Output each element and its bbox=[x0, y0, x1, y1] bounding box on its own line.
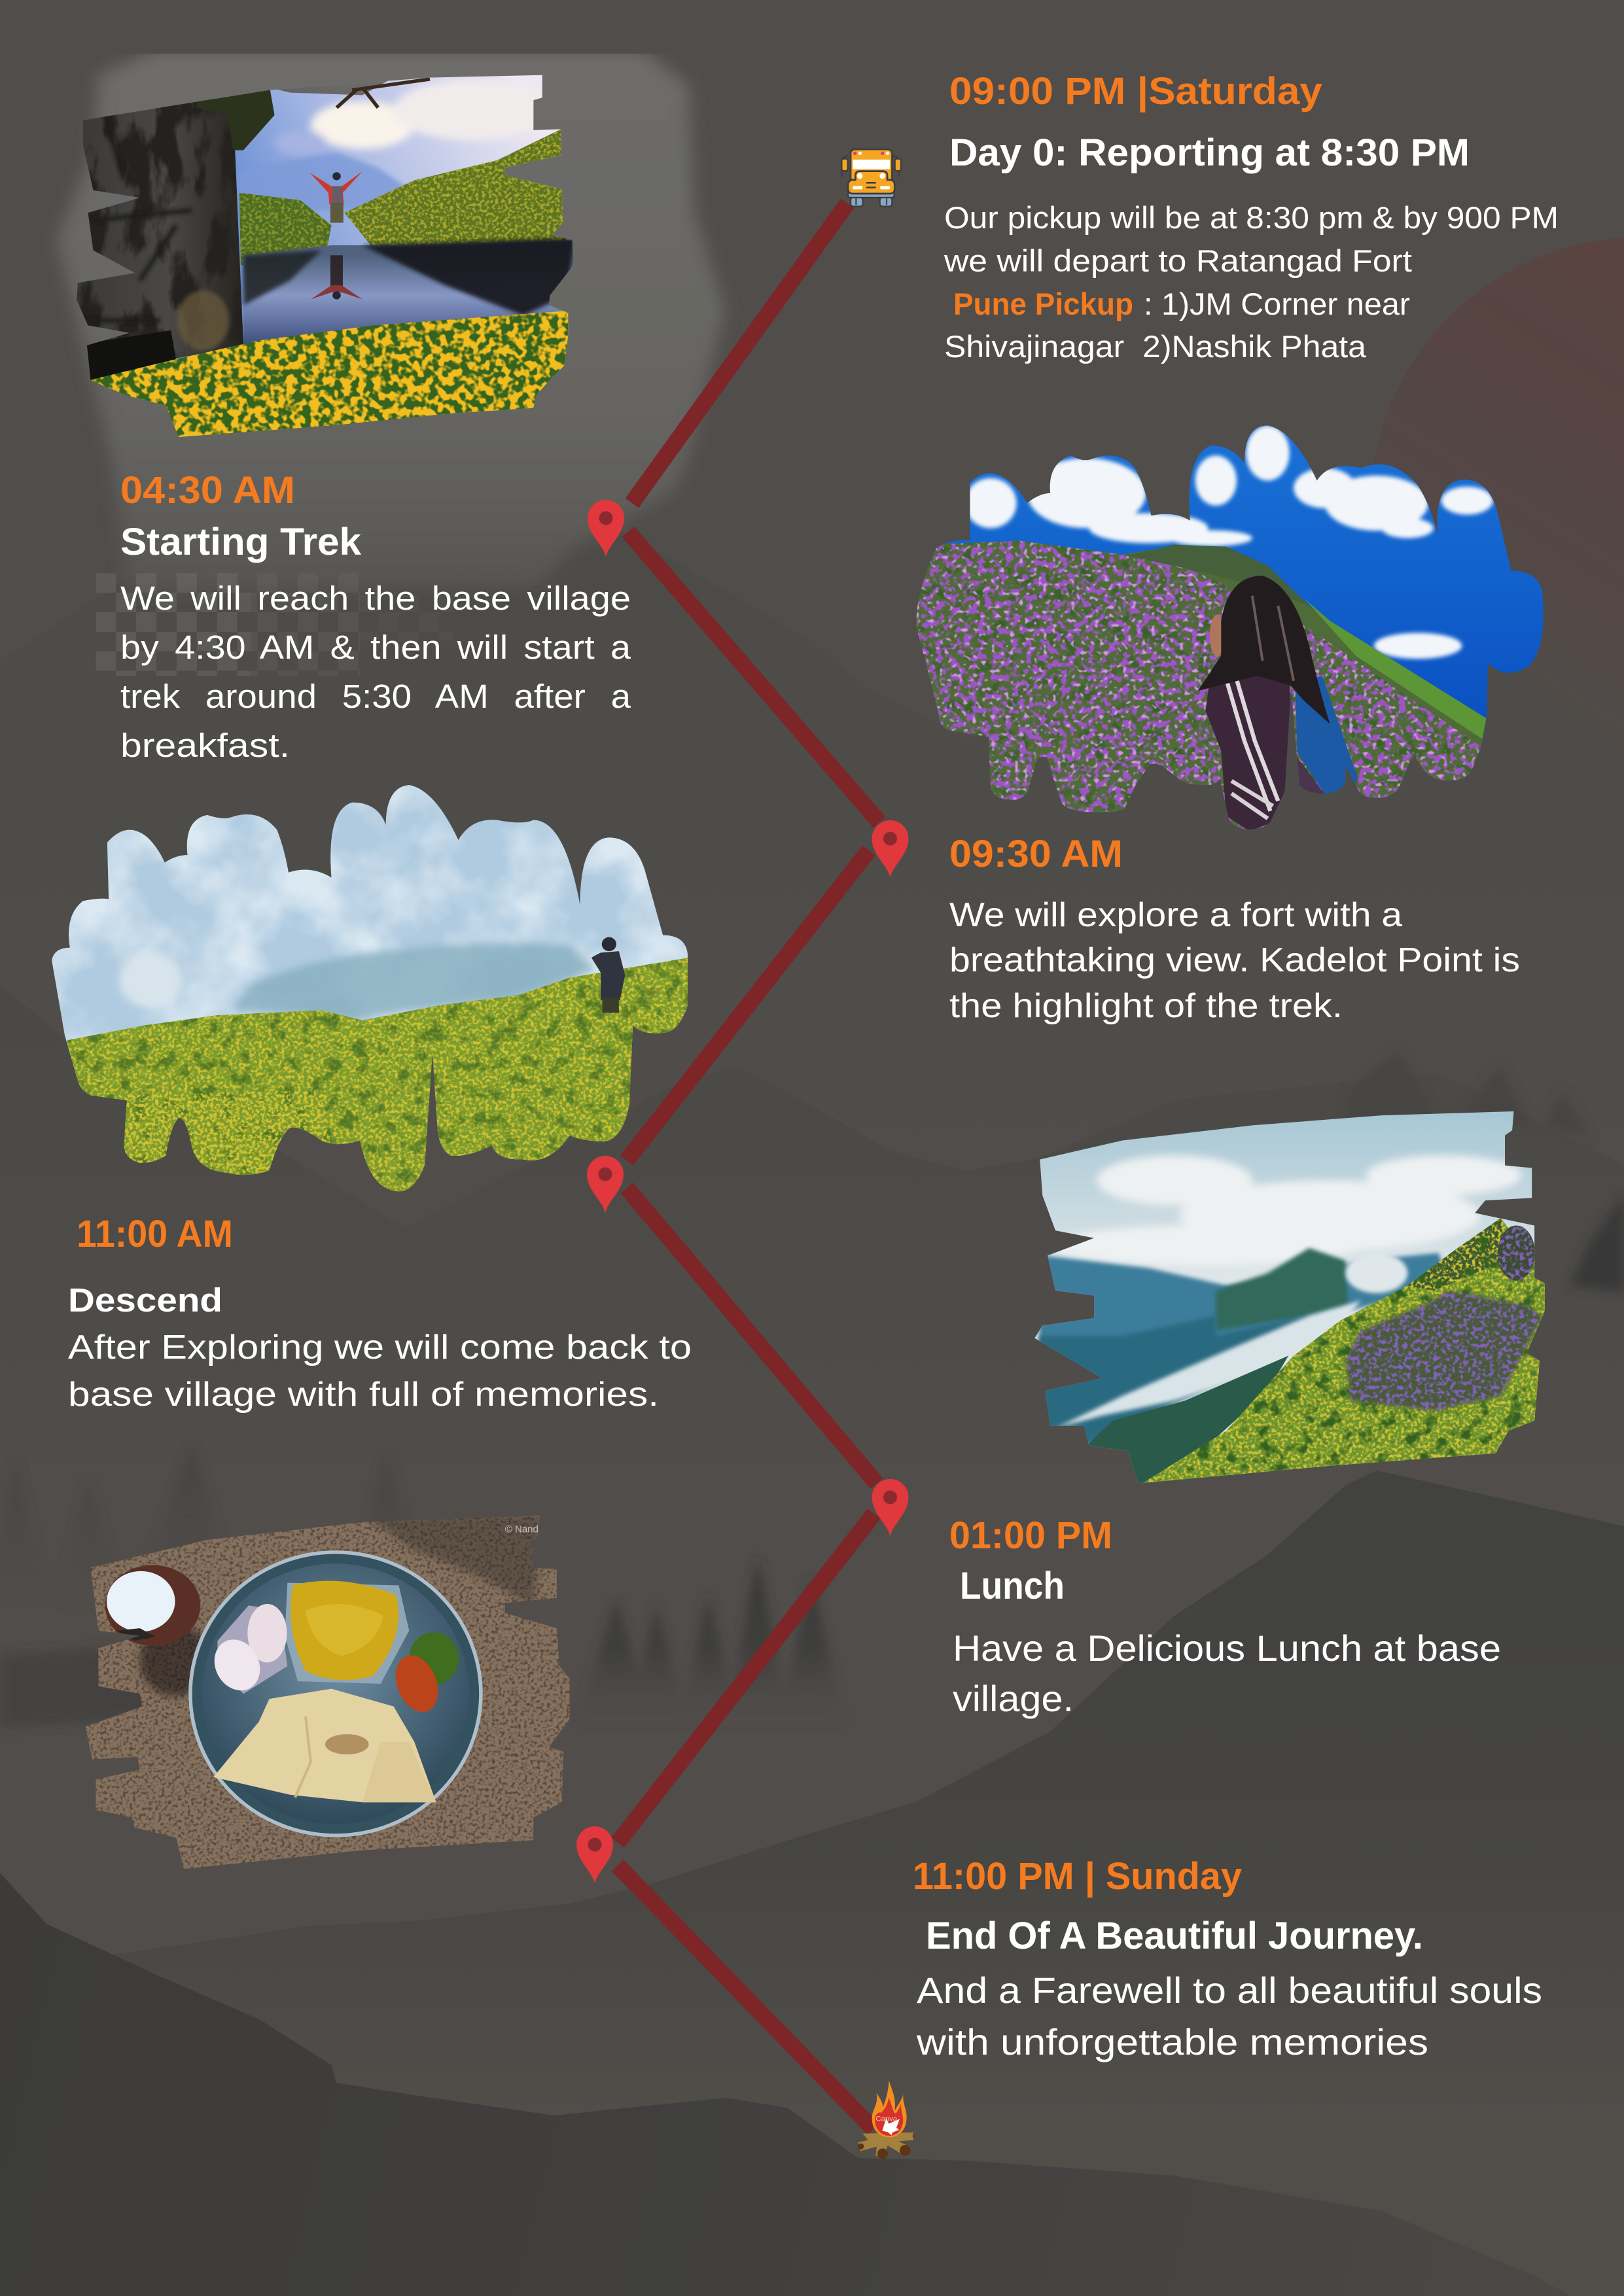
reflected hiker bbox=[311, 255, 362, 300]
background: red sun circle bbox=[1371, 237, 1624, 776]
description bbox=[68, 1329, 692, 1414]
description: village. bbox=[953, 1678, 1074, 1719]
folded roti bbox=[213, 1689, 436, 1802]
description: trek around 5:30 AM after a bbox=[120, 678, 631, 715]
background: front dark ridge bbox=[0, 1873, 1570, 2296]
description: : 1)JM Corner near bbox=[1144, 287, 1410, 321]
text: 09:00 PM Saturday stop bbox=[944, 70, 1559, 364]
background: misty pine trees bbox=[0, 1051, 1624, 1727]
icon: campfire bbox=[858, 2080, 915, 2159]
photo: thali plate on stone bbox=[67, 1510, 575, 1873]
photo: valley with clouds and wildflower slope bbox=[1029, 1105, 1553, 1496]
description: breathtaking view. Kadelot Point is bbox=[949, 941, 1520, 979]
heading: Day 0: Reporting at 8:30 PM bbox=[949, 131, 1470, 174]
map pin: 11:00 PM bbox=[576, 1826, 613, 1884]
time label: 01:00 PM bbox=[949, 1514, 1112, 1557]
text: 11:00 AM stop bbox=[68, 1213, 692, 1414]
background: faded checker texture bbox=[96, 573, 453, 676]
heading: Lunch bbox=[960, 1565, 1065, 1607]
map pin: 01:00 PM bbox=[872, 1479, 908, 1537]
description bbox=[916, 1970, 1542, 2062]
description: After Exploring we will come back to bbox=[68, 1329, 692, 1366]
time label: 09:00 PM |Saturday bbox=[949, 70, 1322, 113]
time label: 04:30 AM bbox=[120, 469, 295, 512]
description: with unforgettable memories bbox=[916, 2021, 1428, 2062]
photo: thali plate on stone: © Nand bbox=[505, 1525, 538, 1535]
heading: End Of A Beautiful Journey. bbox=[926, 1915, 1423, 1957]
description: by 4:30 AM & then will start a bbox=[120, 629, 631, 666]
purple flower clusters bbox=[1345, 1225, 1542, 1411]
icon: campfire: Canva bbox=[875, 2115, 898, 2123]
heading: Starting Trek bbox=[120, 521, 362, 563]
description: We will explore a fort with a bbox=[949, 896, 1402, 934]
time label: 11:00 AM bbox=[77, 1213, 233, 1255]
photo: misty green meadow with photographer bbox=[46, 780, 694, 1196]
steel plate bbox=[188, 1550, 483, 1837]
description: breakfast. bbox=[120, 727, 290, 764]
description bbox=[953, 1627, 1501, 1719]
description: And a Farewell to all beautiful souls bbox=[917, 1970, 1542, 2011]
description: Our pickup will be at 8:30 pm & by 900 PM bbox=[944, 200, 1559, 235]
description: Pune Pickup bbox=[953, 287, 1133, 321]
description bbox=[944, 200, 1559, 364]
clay cup of buttermilk bbox=[105, 1565, 200, 1646]
description: the highlight of the trek. bbox=[949, 987, 1343, 1025]
map pin: 09:30 AM bbox=[872, 820, 908, 878]
time label: 11:00 PM | Sunday bbox=[913, 1855, 1242, 1898]
route: connector lines bbox=[618, 203, 879, 2129]
background: smoke cloud behind first photo bbox=[57, 50, 725, 591]
description bbox=[949, 896, 1520, 1025]
description: We will reach the base village bbox=[120, 580, 631, 617]
description: we will depart to Ratangad Fort bbox=[944, 243, 1412, 278]
description: base village with full of memories. bbox=[68, 1376, 659, 1414]
background: middle mountain range bbox=[0, 985, 1624, 1635]
icon: school bus bbox=[841, 149, 901, 207]
description: Have a Delicious Lunch at base bbox=[953, 1627, 1501, 1669]
photo: hiker reflected in lake with yellow flowers bbox=[67, 70, 580, 445]
background: far mountain range bbox=[0, 487, 1624, 1439]
background: near mountain range bbox=[0, 1470, 1624, 2296]
map pin: 11:00 AM bbox=[587, 1156, 624, 1213]
map pin: 04:30 AM bbox=[588, 500, 624, 557]
description: Shivajinagar 2)Nashik Phata bbox=[944, 329, 1367, 364]
time label: 09:30 AM bbox=[949, 833, 1123, 875]
text: 01:00 PM stop bbox=[949, 1514, 1501, 1719]
description bbox=[120, 580, 631, 764]
heading: Descend bbox=[68, 1281, 222, 1319]
girl with backpack bbox=[1198, 576, 1358, 831]
text: 09:30 AM stop bbox=[949, 833, 1520, 1025]
text: 11:00 PM Sunday stop bbox=[913, 1855, 1542, 2062]
photo: girl in purple flower meadow bbox=[910, 421, 1553, 851]
hiker with raised arms bbox=[309, 171, 362, 223]
photographer bbox=[591, 937, 625, 1013]
text: 04:30 AM stop bbox=[120, 469, 631, 764]
